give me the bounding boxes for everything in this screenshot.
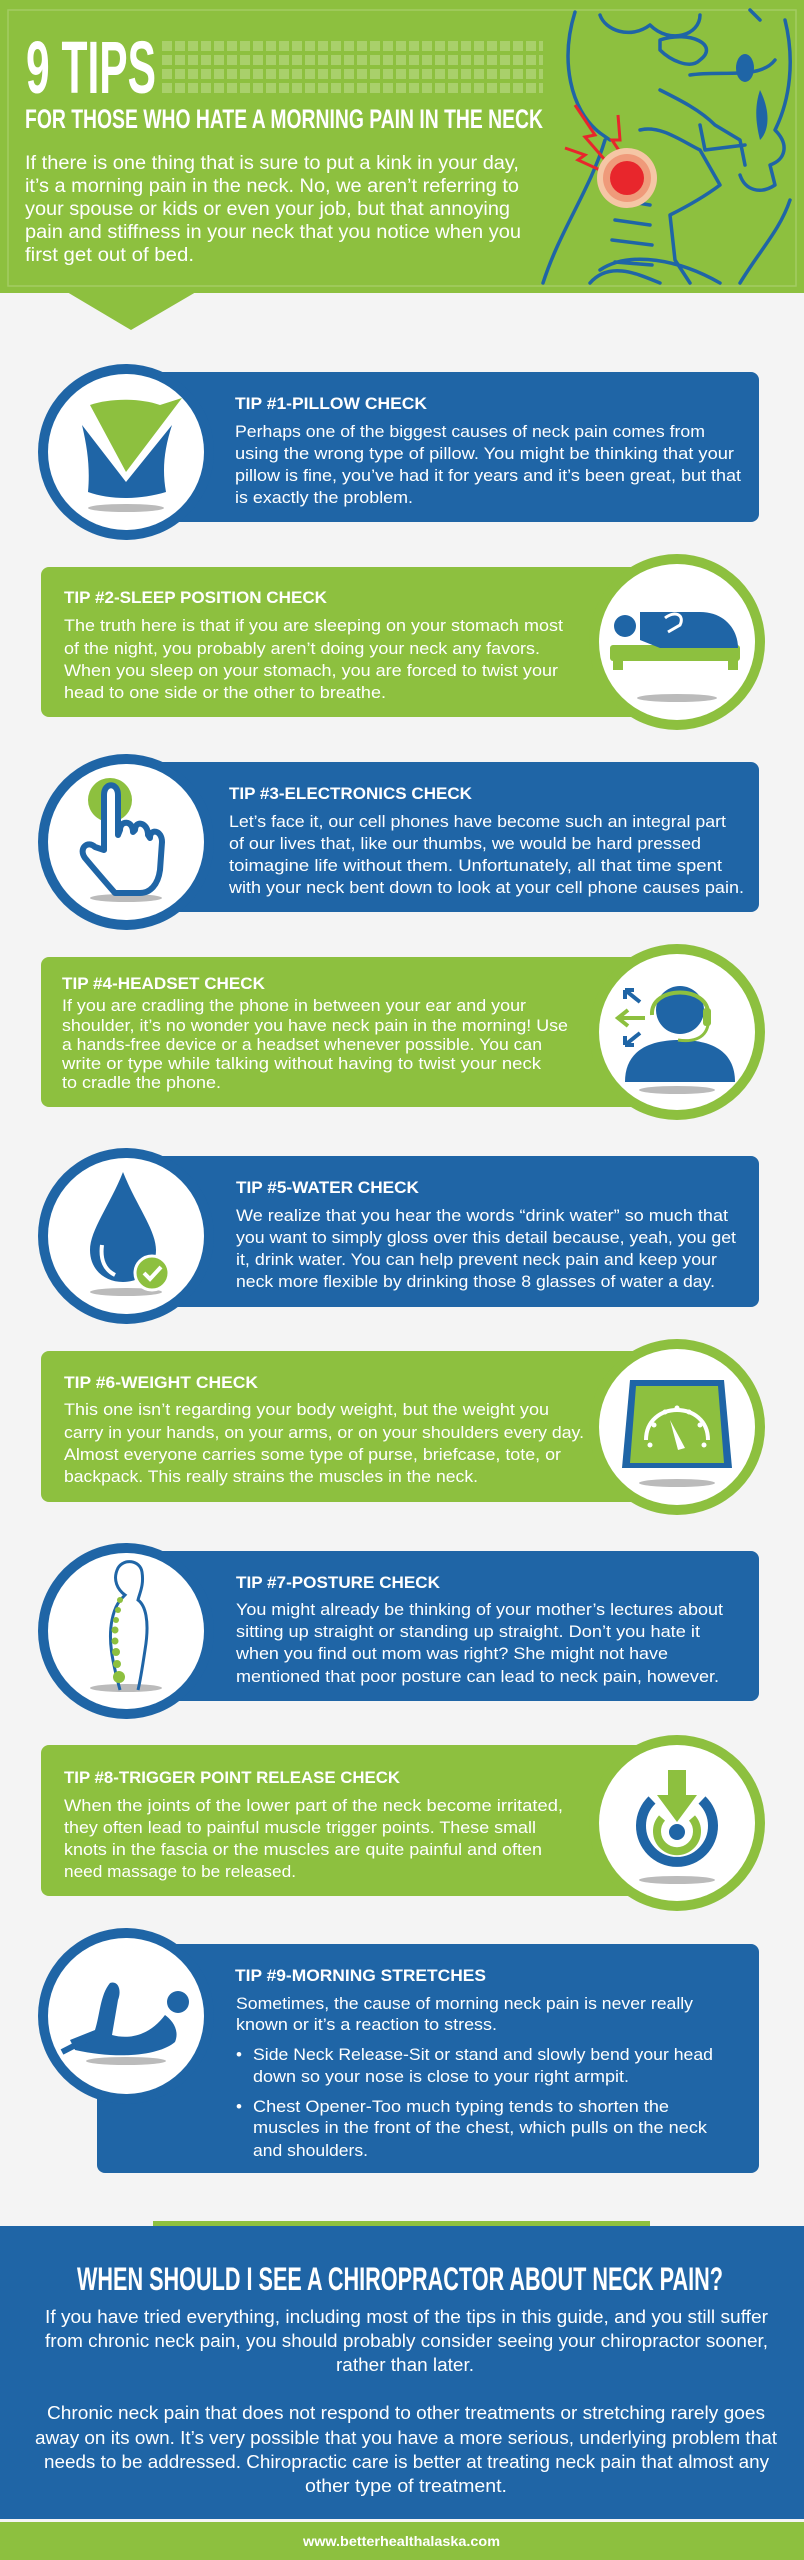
panel: tip 4: write or type while talking without having to twist your neck <box>61 1054 542 1073</box>
panel: tip 8: When the joints of the lower part of the neck become irritated, <box>64 1796 563 1815</box>
panel: tip 2: The truth here is that if you are sleeping on your stomach most <box>64 616 563 635</box>
panel: tip 9: Sometimes, the cause of morning neck pain is never really <box>236 1994 694 2013</box>
footer: www.betterhealthalaska.com <box>302 2533 500 2549</box>
panel: chiropractor section: other type of treatment. <box>305 2476 507 2496</box>
panel: chiropractor section: away on its own. It’s very possible that you have a more serious, underlying problem that <box>35 2428 777 2448</box>
panel: tip 3: of our lives that, like our thumbs, we would be hard pressed <box>229 834 701 853</box>
icon: scale <box>589 1339 765 1515</box>
panel: tip 9: Side Neck Release-Sit or stand and slowly bend your head <box>253 2045 713 2064</box>
panel: tip 4: TIP #4-HEADSET CHECK <box>62 974 266 993</box>
panel: tip 7: when you find out mom was right? She might not have <box>235 1644 668 1663</box>
panel: tip 3: Let’s face it, our cell phones have become such an integral part <box>229 812 726 831</box>
icon: pillow check <box>38 364 214 540</box>
panel: chiropractor section: Chronic neck pain that does not respond to other treatments or stretching rarely goes <box>47 2403 765 2423</box>
panel: tip 5 <box>38 1148 759 1324</box>
panel: tip 4: shoulder, it’s no wonder you have neck pain in the morning! Use <box>62 1016 568 1035</box>
panel: tip 5: neck more flexible by drinking those 8 glasses of water a day. <box>236 1272 715 1291</box>
panel: tip 9: and shoulders. <box>253 2141 368 2160</box>
icon: trigger point <box>589 1735 765 1911</box>
panel: tip 9: Chest Opener-Too much typing tends to shorten the <box>253 2097 669 2116</box>
panel: tip 2: When you sleep on your stomach, you are forced to twist your <box>64 661 558 680</box>
icon: pain spot <box>565 105 657 208</box>
panel: tip 9: known or it’s a reaction to stress. <box>236 2015 497 2034</box>
icon: posture silhouette <box>38 1543 214 1719</box>
icon: pointing hand <box>38 754 214 930</box>
intro text: first get out of bed. <box>25 245 194 266</box>
panel: tip 6 <box>41 1339 765 1515</box>
intro text: your spouse or kids or even your job, but that annoying <box>25 199 510 220</box>
panel: chiropractor section: If you have tried everything, including most of the tips in this guide, and you still suffer <box>45 2307 768 2327</box>
panel: chiropractor section: needs to be addressed. Chiropractic care is better at treating neck pain that almost any <box>44 2452 769 2472</box>
panel: tip 2: TIP #2-SLEEP POSITION CHECK <box>64 588 328 607</box>
panel: tip 3 <box>38 754 759 930</box>
panel: tip 2: head to one side or the other to breathe. <box>64 683 386 702</box>
panel: tip 7: You might already be thinking of your mother’s lectures about <box>236 1600 723 1619</box>
panel: tip 7 <box>38 1543 759 1719</box>
panel: tip 5: it, drink water. You can help prevent neck pain and keep your <box>236 1250 717 1269</box>
panel: tip 4: to cradle the phone. <box>62 1073 221 1092</box>
panel: tip 8 <box>41 1735 765 1911</box>
panel: tip 1: TIP #1-PILLOW CHECK <box>235 394 428 413</box>
panel: tip 9: muscles in the front of the chest, which pulls on the neck <box>253 2118 708 2137</box>
panel: tip 1: pillow is fine, you’ve had it for years and it’s been great, but that <box>235 466 741 485</box>
panel: tip 6: carry in your hands, on your arms, or on your shoulders every day. <box>64 1423 584 1442</box>
panel: tip 7: mentioned that poor posture can lead to neck pain, however. <box>236 1667 719 1686</box>
icon: stretching figure <box>38 1928 214 2104</box>
panel: tip 8: knots in the fascia or the muscles are quite painful and often <box>64 1840 542 1859</box>
panel: tip 4 <box>41 944 765 1120</box>
intro text: If there is one thing that is sure to put a kink in your day, <box>25 153 519 174</box>
panel: tip 7: sitting up straight or standing up straight. Don’t you hate it <box>236 1622 700 1641</box>
panel: tip 8: they often lead to painful muscle trigger points. These small <box>64 1818 536 1837</box>
intro text <box>25 153 521 266</box>
icon: headset person <box>589 944 765 1120</box>
panel: tip 5: We realize that you hear the words “drink water” so much that <box>236 1206 728 1225</box>
panel: tip 9 <box>38 1928 759 2173</box>
panel: tip 9: down so your nose is close to your right armpit. <box>253 2067 629 2086</box>
panel: tip 8: need massage to be released. <box>64 1862 296 1881</box>
icon: water drop with check <box>38 1148 214 1324</box>
intro text: pain and stiffness in your neck that you notice when you <box>25 222 521 243</box>
panel: tip 6: This one isn’t regarding your body weight, but the weight you <box>64 1400 549 1419</box>
panel: tip 9: TIP #9-MORNING STRETCHES <box>235 1966 486 1985</box>
panel: tip 1: is exactly the problem. <box>235 488 413 507</box>
panel: tip 7: TIP #7-POSTURE CHECK <box>236 1573 441 1592</box>
title: 9 tips: 9 TIPS <box>26 26 156 109</box>
panel: tip 3: toimagine life without them. Unfortunately, all that time spent <box>229 856 722 875</box>
panel: tip 1 <box>38 364 759 540</box>
panel: tip 1: Perhaps one of the biggest causes of neck pain comes from <box>235 422 705 441</box>
panel: tip 9: • <box>236 2045 242 2064</box>
panel: tip 3: with your neck bent down to look at your cell phone causes pain. <box>228 878 744 897</box>
panel: tip 2: of the night, you probably aren’t doing your neck any favors. <box>64 639 540 658</box>
panel: tip 5: TIP #5-WATER CHECK <box>236 1178 420 1197</box>
illustration: skeleton neck <box>543 10 790 283</box>
panel: chiropractor section: from chronic neck pain, you should probably consider seeing your chiropractor sooner, <box>45 2331 768 2351</box>
panel: tip 9: • <box>236 2097 242 2116</box>
panel: tip 8: TIP #8-TRIGGER POINT RELEASE CHECK <box>64 1768 401 1787</box>
panel: tip 6: TIP #6-WEIGHT CHECK <box>64 1373 259 1392</box>
panel: tip 1: using the wrong type of pillow. You might be thinking that your <box>235 444 734 463</box>
panel: tip 3: TIP #3-ELECTRONICS CHECK <box>229 784 473 803</box>
panel: tip 4: a hands-free device or a headset whenever possible. You can <box>62 1035 542 1054</box>
panel: tip 4: If you are cradling the phone in between your ear and your <box>62 996 526 1015</box>
panel: tip 6: Almost everyone carries some type of purse, briefcase, tote, or <box>64 1445 561 1464</box>
panel: tip 6: backpack. This really strains the muscles in the neck. <box>64 1467 478 1486</box>
panel: chiropractor section <box>0 2226 804 2519</box>
panel: tip 5: you want to simply gloss over this detail because, yeah, you get <box>236 1228 736 1247</box>
panel: chiropractor section: rather than later. <box>336 2355 474 2375</box>
header panel <box>0 0 804 330</box>
intro text: it’s a morning pain in the neck. No, we aren’t referring to <box>25 176 519 197</box>
subtitle: FOR THOSE WHO HATE A MORNING PAIN IN THE NECK <box>25 104 543 134</box>
panel: tip 2 <box>41 554 765 730</box>
footer <box>0 2522 804 2560</box>
icon: sleeping person <box>589 554 765 730</box>
